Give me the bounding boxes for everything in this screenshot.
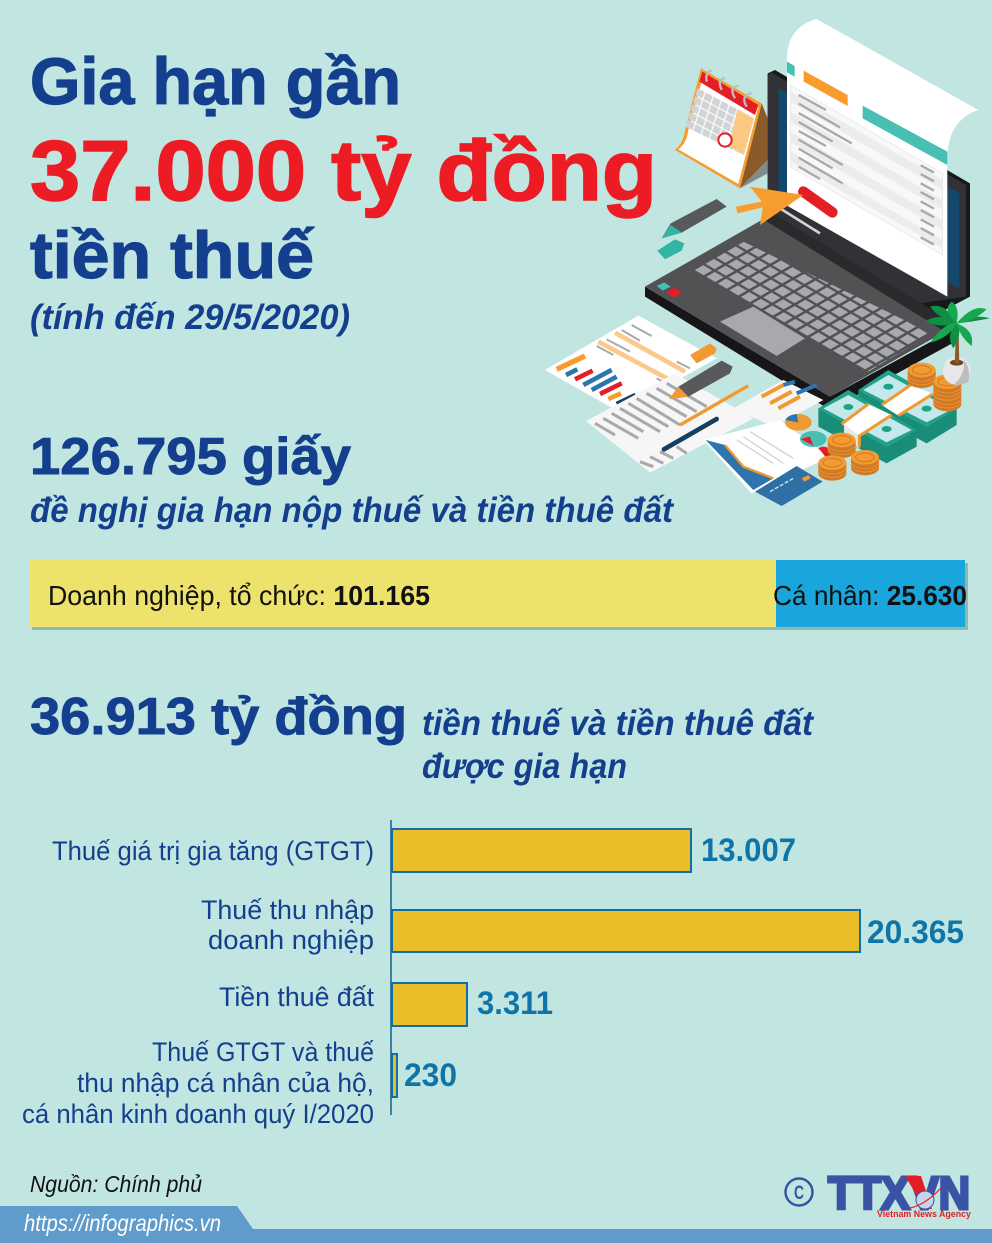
arrow [736,187,803,225]
laptop screen [768,70,970,330]
source: Nguồn: Chính phủ [30,1171,202,1197]
chart sheets [733,380,823,427]
category labels: Thuế thu nhập [201,895,374,925]
illustration: laptop and documents [545,19,990,506]
calendar [675,68,768,188]
footer band [0,1206,992,1243]
money stacks [858,390,957,443]
red button [803,192,832,212]
stat description: được gia hạn [422,747,627,786]
values: 20.365 [867,914,964,950]
laptop base [645,208,958,410]
values: 3.311 [477,985,553,1021]
coins [828,433,856,458]
bars [392,829,860,1097]
stat: 126.795 giấy: 126.795 giấy [30,428,351,486]
title: Gia hạn gần [30,44,401,118]
bar chart [22,820,964,1129]
segment: businesses [30,560,776,627]
stat: 126.795 giấy [30,428,674,530]
category labels: cá nhân kinh doanh quý I/2020 [22,1099,374,1129]
category labels [22,836,374,1129]
segment: individuals [776,560,965,627]
stacked bar [30,560,968,630]
logo: TTXVN: Vietnam News Agency [877,1209,972,1220]
documents, money and plant [545,302,990,506]
category labels: thu nhập cá nhân của hộ, [77,1068,374,1098]
stat: 36.913 tỷ đồng: 36.913 tỷ đồng [30,688,407,746]
title: tiền thuế [30,218,314,292]
category labels: Tiền thuê đất [219,982,374,1012]
title [30,44,657,292]
trackpad [720,307,805,356]
title: 37.000 tỷ đồng [30,124,657,219]
logo: TTXVN: C [794,1183,804,1204]
plant [943,356,971,385]
logo: TTXVN: TTXVN [828,1167,970,1219]
values [404,832,964,1093]
url: https://infographics.vn [24,1210,221,1236]
marker and pens [669,361,733,399]
date note: (tính đến 29/5/2020) [30,298,350,337]
paper sheet [657,19,978,297]
values: 230 [404,1057,457,1093]
list sheet [586,373,753,473]
stat description [422,704,814,786]
label: businesses: Doanh nghiệp, tổ chức: 101.165 [48,580,430,611]
category labels: Thuế giá trị gia tăng (GTGT) [52,836,374,866]
values: 13.007 [701,832,796,868]
marker [662,199,727,238]
credit card [755,466,823,506]
stat description: đề nghị gia hạn nộp thuế và tiền thuê đất [30,491,674,530]
stat description: tiền thuế và tiền thuê đất [422,704,814,743]
category labels: doanh nghiệp [208,925,374,955]
report sheet [545,316,717,412]
category labels: Thuế GTGT và thuế [152,1037,374,1067]
buttons [657,282,671,291]
keyboard [692,242,932,372]
label: individuals: Cá nhân: 25.630 [773,580,967,611]
